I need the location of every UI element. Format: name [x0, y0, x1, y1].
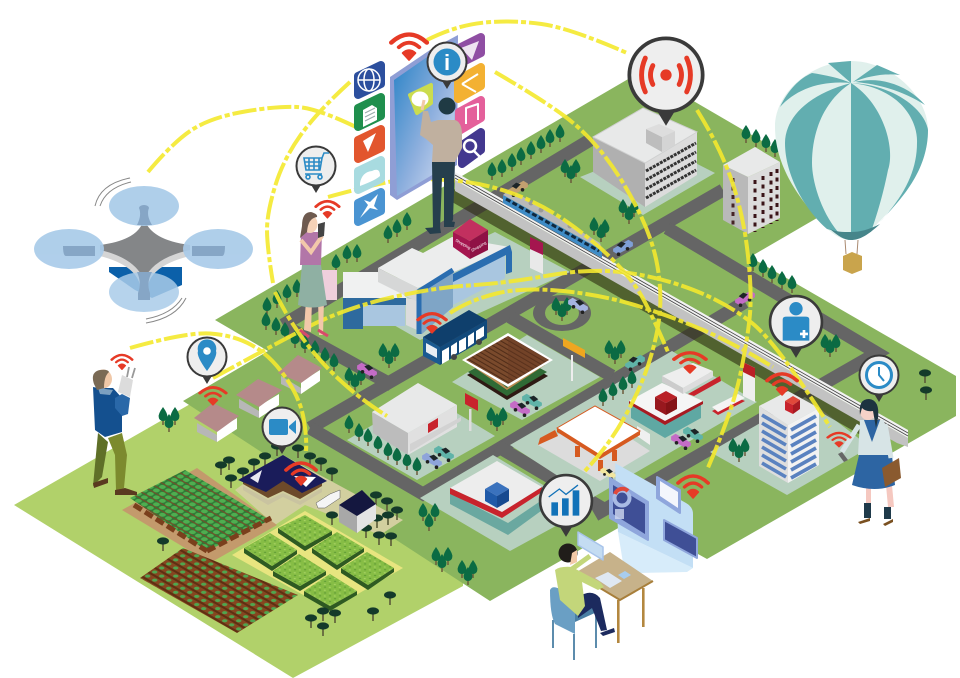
desk worker — [550, 532, 653, 660]
bubble: information: i — [444, 50, 450, 75]
crop field with plants — [122, 468, 277, 563]
bubble: information — [428, 42, 466, 89]
app icons: right column — [458, 37, 481, 164]
drone pilot — [93, 367, 137, 495]
brown roof building — [462, 333, 553, 400]
connection arcs — [130, 22, 830, 473]
hot air balloon — [775, 61, 928, 274]
bubble: shopping cart — [296, 146, 336, 193]
farm yard — [235, 455, 403, 535]
wifi signal icons — [112, 34, 850, 498]
girl student — [838, 399, 901, 526]
shopping center — [343, 219, 543, 334]
red roofed store — [629, 362, 755, 438]
ground: light green farmland — [14, 403, 463, 678]
road network — [283, 140, 877, 515]
shopping center: Shopping — [454, 238, 472, 250]
shopping center: Shopping — [470, 240, 487, 253]
farm shed — [339, 490, 376, 533]
office building — [593, 108, 697, 207]
woman with shopping bag — [298, 212, 337, 337]
bubble: clock — [860, 356, 898, 402]
white warehouse — [372, 383, 461, 455]
train — [503, 189, 602, 258]
red roadside sign — [465, 393, 478, 431]
man touching the phone — [420, 98, 462, 234]
ground: city land — [183, 71, 956, 601]
yellow roadside sign — [563, 338, 585, 381]
hologram panel — [610, 463, 697, 573]
gas station — [538, 406, 650, 481]
elevated rail shadow — [445, 184, 880, 446]
city bus — [423, 310, 487, 365]
building plots — [347, 145, 870, 551]
elevated railway — [455, 172, 908, 447]
bubble: analytics chart — [540, 475, 592, 537]
app icons: left column — [358, 65, 381, 222]
vegetable rows field — [140, 548, 298, 633]
bubble: broadcast signal — [629, 38, 703, 126]
cars — [357, 181, 755, 480]
pickup truck — [316, 490, 340, 508]
bubble: video camera — [262, 408, 302, 454]
bubble: map pin — [188, 338, 226, 384]
blue store — [450, 461, 545, 535]
high-rise office — [759, 391, 819, 483]
roundabout — [533, 295, 591, 331]
drone — [34, 178, 253, 323]
farm barn — [238, 455, 327, 505]
rice paddies — [232, 511, 403, 611]
trees — [157, 124, 932, 636]
farm houses — [194, 355, 322, 442]
bubble: medical person — [770, 296, 822, 358]
smartphone — [390, 35, 458, 200]
apartment tower — [723, 147, 780, 234]
